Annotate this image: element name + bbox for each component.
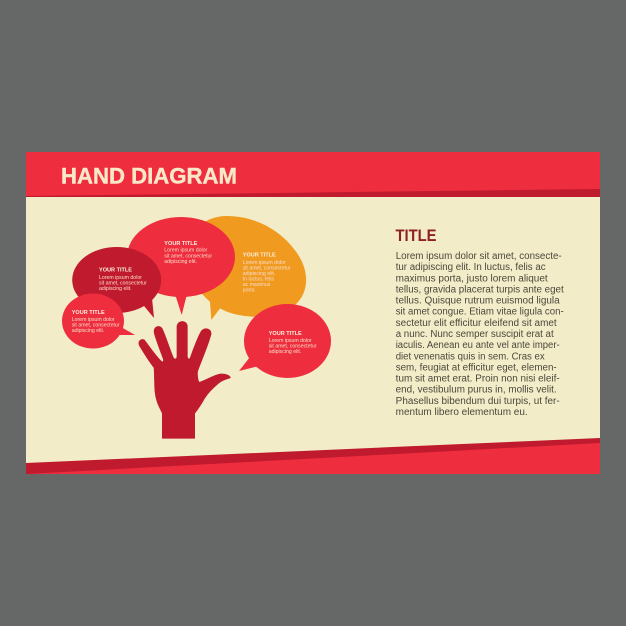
bubble: top red: YOUR TITLE: [164, 241, 198, 247]
bubble: right red: [239, 304, 331, 378]
body paragraph: Phasellus bibendum dui turpis, ut fer-: [396, 396, 560, 407]
body paragraph: iaculis. Aenean eu ante vel ante imper-: [396, 340, 560, 351]
footer band: [26, 438, 600, 474]
bubble: top red: sit amet, consectetur: [164, 254, 212, 260]
bubble: small left red: YOUR TITLE: [72, 310, 105, 316]
bubble: dark red: [72, 247, 161, 318]
bubble: orange: adipiscing elit.: [243, 271, 275, 277]
title: HAND DIAGRAM: [61, 163, 237, 188]
body paragraph: tellus. Quisque rutrum euismod ligula: [396, 296, 560, 307]
bubble: orange: YOUR TITLE: [243, 253, 276, 259]
hand diagram: [62, 216, 331, 438]
bubble: top red: [127, 217, 235, 315]
body paragraph: tur adipiscing elit. In luctus, felis ac: [396, 262, 546, 273]
body paragraph: mentum libero elementum eu.: [396, 407, 528, 418]
header banner: [26, 152, 600, 197]
body paragraph: tellus, gravida placerat turpis ante eget: [396, 284, 564, 295]
body paragraph: maximus porta, justo lorem aliquet: [396, 273, 548, 284]
bubble: orange: Lorem ipsum dolor: [243, 260, 286, 266]
bubble: dark red: Lorem ipsum dolor: [99, 275, 142, 281]
bubble: small left red: adipiscing elit.: [72, 328, 104, 334]
bubble: right red: YOUR TITLE: [269, 331, 302, 337]
bubble: dark red: sit amet, consectetur: [99, 280, 147, 286]
text block: title and body: [396, 227, 564, 418]
bubble: dark red: adipiscing elit.: [99, 286, 132, 292]
bubble: dark red: YOUR TITLE: [99, 268, 132, 274]
bubble: orange: sit amet, consectetur: [243, 266, 291, 272]
body paragraph: sectetur elit efficitur eleifend sit amet: [396, 318, 557, 329]
bubble: orange: ac maximus: [243, 282, 271, 288]
bubble: orange: [183, 216, 306, 320]
bubble: right red: sit amet, consectetur: [269, 344, 317, 350]
body paragraph: diet venenatis quis in sem. Cras ex: [396, 351, 545, 362]
body paragraph: sem, feugiat at efficitur eget, elemen-: [396, 362, 557, 373]
body paragraph: sit amet congue. Etiam vitae ligula con-: [396, 307, 564, 318]
body paragraph: tum sit amet erat. Proin non nisi eleif-: [396, 374, 560, 384]
body paragraph: Lorem ipsum dolor sit amet, consecte-: [396, 251, 562, 262]
bubble: right red: Lorem ipsum dolor: [269, 338, 312, 344]
body paragraph: a nunc. Nunc semper suscipit erat at: [396, 329, 554, 340]
bubble: orange: In luctus, felis: [243, 276, 275, 282]
bubble: small left red: Lorem ipsum dolor: [72, 317, 115, 323]
bubble: small left red: [62, 294, 135, 348]
bubble: top red: adipiscing elit.: [164, 259, 197, 265]
icon: hand: [139, 321, 230, 438]
bubble: orange: porta: [243, 288, 255, 294]
heading: TITLE: [396, 227, 436, 245]
bubble: small left red: sit amet, consectetur: [72, 322, 120, 328]
bubble: right red: adipiscing elit.: [269, 349, 301, 355]
body paragraph: end, vestibulum purus in, mollis velit.: [396, 385, 557, 396]
panel: cream slide background: [26, 152, 600, 474]
body paragraph: [396, 251, 564, 418]
bubble: top red: Lorem ipsum dolor: [164, 248, 208, 254]
